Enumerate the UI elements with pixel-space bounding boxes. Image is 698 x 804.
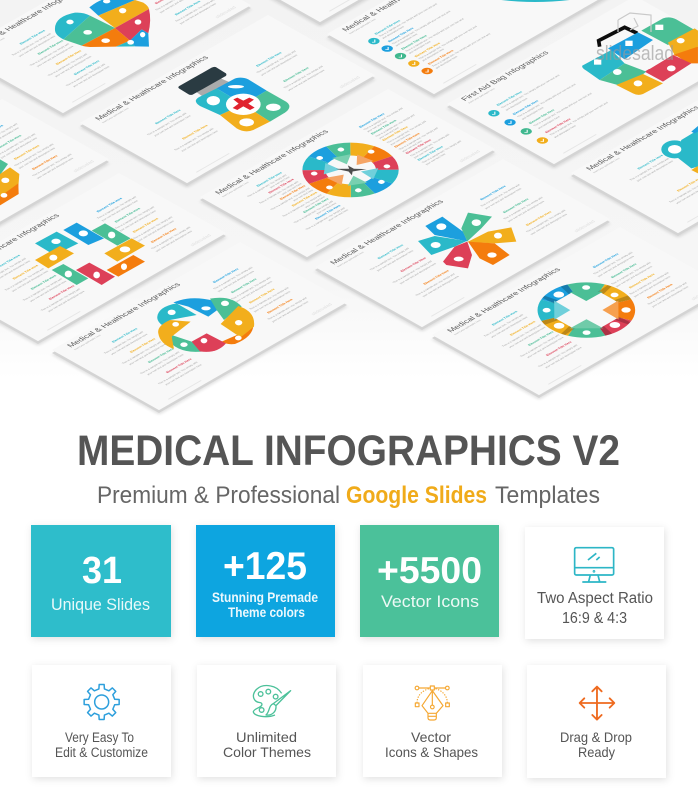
icon: gear (84, 684, 119, 719)
panel: top slide edge (209, 0, 512, 27)
card: aspect ratio: 16:9 & 4:3 (562, 610, 627, 627)
panel: first aid bag slide: This is a sample text. You simply add your own text and (532, 92, 593, 127)
panel: bottle slide: Element Title Here (255, 51, 283, 67)
panel: swirl cross slide: your own text and description here (270, 300, 310, 323)
panel: swirl cross slide: This is a sample text. You simply add (266, 296, 308, 321)
panel: slide with list and blue arc: and description here (421, 47, 446, 62)
panel: bottle slide: Element Title Here (181, 124, 209, 140)
panel: cross slide: Element Title Here (96, 197, 124, 213)
panel: heart slide: your own text and description here (71, 65, 111, 88)
panel: circle and cross slide: This is a sample text. You simply add (610, 261, 652, 285)
panel: bottle slide: your own text and description here (180, 129, 219, 152)
panel: flower slide: This is a sample text. You simply add (368, 247, 411, 271)
panel: left slide with orange pieces: This is a sample text. You simply add (31, 153, 73, 177)
panel: swirl cross slide: Element Title Here (266, 298, 294, 314)
panel: caduceus ring slide: This is a sample text. You simply add (421, 140, 463, 164)
panel: swirl cross slide: your own text and description here (146, 353, 185, 376)
card: 125 theme colors: +125 (223, 545, 307, 588)
card: 31 unique slides: Unique Slides (51, 596, 150, 614)
panel: circle and cross slide: your own text and description here (614, 265, 654, 288)
panel: bottle slide: Insert your subheader here (101, 107, 131, 124)
panel: first aid bag slide (443, 0, 698, 169)
panel: caduceus ring slide: your own text here (389, 133, 412, 146)
panel: circle and cross slide: your own text and description here (596, 255, 636, 278)
panel: slide with list and blue arc: and description here (407, 40, 432, 54)
panel: heart slide: This is a sample text. You simply add (28, 42, 71, 67)
panel: circle and cross slide: your own text and description here (508, 326, 547, 348)
panel: swirl cross slide: Element Title Here (129, 337, 157, 353)
puzzle graphic (661, 126, 698, 173)
panel: swirl cross slide (48, 242, 351, 415)
panel: flower slide: your own text and description here (506, 200, 546, 223)
panel: slide with list and blue arc: and description here (381, 25, 406, 39)
panel: cross slide: your own text and description here (118, 209, 158, 232)
panel: circle and cross slide: Element Title Here (491, 310, 519, 326)
panel: cross slide: your own text and description here (10, 270, 50, 292)
panel: swirl cross slide: Insert your subheader here (73, 334, 103, 351)
panel: heart slide: Element Title Here (19, 29, 47, 45)
card: easy to edit: Edit & Customize (55, 745, 148, 760)
panel: cross slide: Element Title Here (48, 284, 76, 300)
card: 31 unique slides (31, 525, 171, 637)
panel: cross slide: Element Title Here (114, 207, 142, 223)
panel: circle and cross slide: Element Title Here (545, 341, 573, 357)
hero: isometric slides collage (0, 0, 698, 415)
panel: heart slide: This is a sample text. You simply add (65, 63, 107, 87)
panel: circle and cross slide: your own text and description here (489, 316, 529, 338)
panel: caduceus ring slide: Element Title Here (393, 132, 421, 148)
panel: slide with list and blue arc: Element Title Here (387, 27, 415, 43)
panel: caduceus ring slide: your own text here (327, 208, 350, 221)
panel: left slide with orange pieces: This is a sample text. You simply add (13, 143, 55, 167)
panel: flower slide: your own text and description here (398, 262, 438, 285)
panel: caduceus ring slide: Element Title Here (370, 119, 398, 135)
panel: swirl cross slide: your own text and description here (109, 333, 149, 355)
panel: heart slide: Element Title Here (55, 49, 83, 66)
panel: cross slide: Element Title Here (150, 227, 178, 243)
panel: cross slide: This is a sample text. You simply add (3, 267, 46, 291)
swirl graphic (157, 298, 254, 352)
panel: circle and cross slide: Element Title Here (592, 253, 620, 269)
panel: bottle slide: your own text and description here (153, 114, 192, 137)
panel: heart slide: your own text and description here (35, 45, 75, 67)
panel: cross slide: Element Title Here (132, 217, 160, 233)
panel: flower slide: This is a sample text. You simply add (391, 260, 433, 284)
panel: circle and cross slide: This is a sample text. You simply add (592, 251, 634, 275)
title: MEDICAL INFOGRAPHICS V2 (77, 427, 620, 475)
card: easy to edit (32, 665, 171, 777)
card: vector shapes: Vector (411, 729, 451, 745)
card: 31 unique slides: 31 (82, 550, 122, 592)
panel: first aid bag slide: Element Title Here (495, 90, 524, 106)
card: 125 theme colors (196, 525, 335, 637)
panel: flower slide: your own text and description here (529, 213, 569, 235)
panel: flower slide: Element Title Here (479, 185, 507, 201)
panel: right puzzle slide: Element Title Here (636, 154, 665, 170)
card: aspect ratio: Two Aspect Ratio (537, 590, 653, 607)
panel: first aid bag slide: and description here (520, 106, 545, 120)
panel: flower slide: This is a sample text. You simply add (479, 183, 521, 207)
panel: caduceus ring slide: your own text here (424, 152, 447, 166)
panel: circle and cross slide: Element Title Here (509, 320, 537, 336)
panel: caduceus ring slide: your own text here (315, 202, 338, 215)
panel: bottle slide: Medical & Healthcare Infographics (93, 54, 211, 122)
card: vector shapes: Icons & Shapes (385, 744, 478, 760)
watermark: slidesalad (596, 43, 674, 65)
panel: flower slide: your own text and description here (483, 187, 523, 210)
panel: flower slide: Insert your subheader here (336, 251, 366, 268)
panel: slide with list and blue arc: and description here (434, 55, 459, 69)
panel: heart slide: This is a sample text. You simply add (10, 32, 53, 56)
panel: caduceus ring slide: Element Title Here (267, 178, 295, 194)
panel: heart slide: your own text and description here (17, 35, 57, 57)
subtitle (97, 482, 600, 509)
card: color themes: Color Themes (223, 744, 311, 760)
panel: cross slide: This is a sample text. You simply add (132, 216, 174, 240)
card: drag and drop (527, 665, 666, 778)
panel: swirl cross slide: Element Title Here (212, 268, 240, 284)
panel: swirl cross slide: your own text and description here (164, 363, 203, 386)
panel: heart slide: Element Title Here (37, 39, 65, 55)
panel: swirl cross slide: your own text and description here (128, 343, 167, 366)
panel: swirl cross slide: This is a sample text. You simply add (103, 330, 145, 354)
panel: flower slide: Element Title Here (525, 210, 553, 227)
panel: cross slide: your own text and description here (46, 290, 86, 313)
card: vector shapes (363, 665, 502, 777)
panel: caduceus ring slide: your own text here (280, 182, 303, 195)
panel: bottle slide: Element Title Here (154, 109, 182, 125)
panel: left slide with orange pieces (0, 99, 113, 272)
panel: circle and cross slide: This is a sample text. You simply add (483, 313, 525, 337)
icon: monitor (575, 548, 614, 582)
panel: caduceus ring slide: Element Title Here (302, 197, 330, 214)
panel: caduceus ring slide: slidesalad (458, 149, 482, 163)
panel: slide with list and blue arc: This is a sample text. You simply add your own text and (404, 17, 465, 52)
panel: cross slide: your own text and description here (136, 219, 176, 242)
panel: circle and cross slide: your own text and description here (650, 285, 690, 308)
panel: left slide with orange pieces: slidesalad (72, 159, 96, 173)
panel: cross slide: This is a sample text. You simply add (21, 277, 64, 301)
icon: palette and brush (253, 686, 291, 717)
panel: caduceus ring slide: This is a sample text. You simply add (409, 133, 451, 157)
panel: heart slide: Element Title Here (73, 60, 101, 76)
panel: circle and cross slide: This is a sample text. You simply add (628, 271, 670, 295)
panel: heart slide: your own text and description here (53, 55, 93, 78)
panel: swirl cross slide: This is a sample text. You simply add (139, 351, 181, 375)
icon: pen tool (415, 686, 449, 720)
panel: bottle slide: This is a sample text. You simply add (146, 112, 188, 136)
panel: cross slide: This is a sample text. You simply add (150, 226, 192, 250)
card: 125 theme colors: Stunning Premade (212, 589, 318, 605)
panel: swirl cross slide: your own text and description here (216, 270, 256, 293)
panel: first aid bag slide: and description here (553, 124, 578, 139)
hero background (0, 0, 698, 395)
panel: swirl cross slide: This is a sample text. You simply add (157, 361, 199, 385)
panel: first aid bag slide: Element Title Here (528, 109, 556, 125)
panel: right puzzle slide: your own text and description here (635, 159, 675, 182)
panel: first aid bag slide: Element Title Here (512, 99, 540, 116)
panel: circle and cross slide: Insert your subheader here (453, 319, 483, 336)
panel: slide with list and blue arc: Element Title Here (427, 49, 455, 65)
panel: first aid bag slide: and description here (504, 97, 529, 111)
card: 5500 vector icons: +5500 (377, 550, 482, 591)
panel: caduceus ring slide: your own text here (401, 139, 424, 153)
panel: cross slide: Element Title Here (30, 274, 58, 290)
panel: bottle slide: Element Title Here (282, 66, 310, 83)
panel: caduceus ring slide: This is a sample text. You simply add (258, 180, 300, 204)
panel: first aid bag slide: Element Title Here (544, 118, 572, 134)
panel: circle and cross slide: Element Title Here (610, 263, 638, 279)
panel: cross slide: your own text and description here (100, 199, 140, 222)
panel: swirl cross slide: slidesalad (310, 302, 334, 316)
panel: caduceus ring slide: This is a sample text. You simply add (246, 174, 288, 198)
pie ring graphic (515, 269, 658, 351)
card: easy to edit: Very Easy To (65, 730, 134, 745)
card: color themes: Unlimited (236, 729, 297, 745)
panel: caduceus ring slide: your own text here (303, 195, 327, 208)
panel: cross slide: This is a sample text. You simply add (114, 205, 156, 230)
first aid bag puzzle graphic (582, 17, 698, 95)
panel: bottle slide: slidesalad (338, 75, 362, 89)
panel: caduceus ring slide: your own text here (377, 126, 401, 139)
panel: slide with list and blue arc: This is a sample text. You simply add your own text and (417, 25, 479, 60)
panel: first aid bag slide: and description here (536, 115, 561, 129)
card: 125 theme colors: Theme colors (228, 604, 305, 620)
panel: caduceus ring slide: Element Title Here (358, 112, 386, 129)
subtitle: Premium & Professional (97, 482, 340, 509)
panel: first aid bag slide: First Aid Bag Infographics (459, 49, 551, 102)
panel: circle and cross slide: This is a sample text. You simply add (537, 344, 579, 368)
card: color themes (197, 665, 336, 777)
panel: circle and cross slide: your own text and description here (632, 275, 672, 298)
panel: flower slide: This is a sample text. You simply add (502, 196, 544, 220)
panel: slide with list and blue arc: This is a sample text. You simply add your own text and (431, 32, 492, 67)
ring chart (277, 128, 424, 212)
panel: circle and cross slide: This is a sample text. You simply add (646, 281, 688, 306)
panel: swirl cross slide: This is a sample text. You simply add (121, 340, 163, 365)
panel: first aid bag slide: This is a sample text. You simply add your own text and (516, 83, 577, 118)
panel: flower slide: Medical & Healthcare Infographics (328, 198, 446, 266)
panel: flower slide: This is a sample text. You simply add (414, 272, 456, 297)
panel: right puzzle slide (567, 65, 698, 238)
partial graphic (0, 159, 19, 205)
panel: bottle slide: This is a sample text. You simply add (173, 127, 215, 151)
watermark (596, 13, 674, 65)
panel: caduceus ring slide: your own text here (292, 188, 315, 202)
panel: caduceus ring slide: This is a sample text. You simply add (304, 206, 347, 231)
card: drag and drop: Drag & Drop (560, 729, 632, 745)
panel: caduceus ring slide: Medical & Healthcare Infographics (213, 128, 331, 196)
panel: caduceus ring slide: your own text here (412, 146, 435, 159)
panel: caduceus ring slide: This is a sample text. You simply add (385, 120, 428, 144)
panel: right puzzle slide: This is a sample text. You simply add (628, 157, 670, 181)
panel: slide with list and blue arc: Insert your subheader here (348, 18, 378, 35)
panel: cross slide: your own text and description here (28, 280, 68, 302)
panel: flower slide: Element Title Here (502, 198, 530, 214)
panel: left slide with orange pieces: your own text and description here (0, 136, 39, 159)
heart graphic (55, 0, 150, 47)
panel: caduceus ring slide: Insert your subheader here (221, 181, 251, 198)
subtitle: Google Slides (346, 482, 487, 509)
panel: circle and cross slide: Element Title Here (628, 273, 656, 289)
panel: swirl cross slide: Element Title Here (248, 288, 276, 304)
panel: caduceus ring slide: Element Title Here (314, 204, 342, 220)
subtitle: Templates (495, 482, 600, 509)
panel: caduceus ring slide: Element Title Here (255, 171, 284, 187)
panel: first aid bag slide: Insert your subheader here (467, 87, 497, 104)
panel: circle and cross slide: Medical & Healthcare Infographics (445, 266, 563, 334)
panel: flower slide (311, 159, 614, 332)
panel: swirl cross slide: This is a sample text. You simply add (212, 266, 254, 290)
card: drag and drop: Ready (578, 744, 615, 760)
blue arc graphic (501, 0, 570, 2)
card: 5500 vector icons: Vector Icons (381, 592, 479, 611)
panel: flower slide: Element Title Here (399, 256, 428, 273)
panel: heart slide: your own text and description here (178, 2, 218, 25)
panel: right puzzle slide: Medical & Healthcare Infographics (584, 104, 698, 172)
panel: circle and cross slide: Element Title Here (646, 283, 674, 299)
panel: circle and cross slide: This is a sample text. You simply add (519, 333, 561, 358)
panel: bottle slide: This is a sample text. You simply add (282, 65, 324, 89)
panel: swirl cross slide: This is a sample text. You simply add (230, 276, 272, 300)
panel: swirl cross slide: Element Title Here (165, 358, 193, 374)
panel: caduceus ring slide: your own text here (365, 120, 389, 133)
panel: caduceus ring slide: This is a sample text. You simply add (269, 187, 311, 211)
panel: cross slide (0, 173, 230, 346)
panel: swirl cross slide: Medical & Healthcare Infographics (65, 281, 183, 349)
panel: left slide with orange pieces: Element Title Here (31, 154, 59, 171)
panel: swirl cross slide: your own text and description here (234, 280, 274, 303)
panel: circle and cross slide: Element Title Here (527, 330, 555, 346)
panel: circle and cross slide: This is a sample text. You simply add (501, 323, 543, 347)
panel: swirl cross slide: Element Title Here (147, 348, 175, 364)
panel: bottle slide (76, 15, 379, 188)
panel: circle and cross slide: your own text and description here (544, 346, 583, 369)
panel: caduceus ring slide: This is a sample text. You simply add (397, 126, 440, 151)
panel: slide with list and blue arc: Element Title Here (374, 19, 402, 35)
panel: swirl cross slide: Element Title Here (230, 278, 258, 294)
panel: cross slide: slidesalad (189, 233, 213, 247)
panel: caduceus ring slide: Element Title Here (416, 145, 445, 161)
panel: swirl cross slide: your own text and description here (252, 290, 292, 313)
panel: slide with list and blue arc (323, 0, 626, 99)
panel: circle and cross slide (428, 227, 698, 400)
panel: first aid bag slide: This is a sample text. You simply add your own text and (500, 74, 561, 109)
icon: move arrows (580, 687, 614, 720)
panel: caduceus ring slide: This is a sample text. You simply add (362, 107, 404, 131)
panel: caduceus ring slide: This is a sample text. You simply add (281, 193, 323, 218)
panel: cross slide: Element Title Here (12, 264, 40, 280)
panel: caduceus ring slide: your own text here (268, 175, 291, 189)
panel: left slide with orange pieces: your own text and description here (17, 147, 57, 169)
panel: caduceus ring slide: Element Title Here (291, 191, 319, 207)
panel: right puzzle slide: Insert your subheader here (592, 157, 622, 174)
panel: caduceus ring slide: Element Title Here (381, 125, 409, 142)
panel: first aid bag slide: This is a sample text. You simply add your own text and (548, 101, 610, 136)
cross graphic (35, 223, 145, 285)
panel: heart slide: slidesalad (214, 5, 238, 19)
card: aspect ratio (525, 527, 664, 639)
panel: flower slide: Element Title Here (377, 244, 405, 260)
panel: caduceus ring slide (196, 89, 499, 262)
panel: bottle slide: your own text and description here (286, 69, 326, 91)
panel: heart slide (0, 0, 255, 118)
panel: flower slide: slidesalad (573, 219, 597, 233)
card: 5500 vector icons (360, 525, 499, 637)
panel: circle and cross slide: your own text and description here (526, 336, 565, 359)
panel: cross slide: This is a sample text. You simply add (40, 287, 82, 312)
panel: slide with list and blue arc: and description here (394, 33, 419, 47)
panel: swirl cross slide: Element Title Here (111, 327, 139, 343)
panel: slide with list and blue arc: Element Title Here (414, 42, 442, 58)
panel: heart slide: This is a sample text. You simply add (47, 52, 89, 77)
panel: flower slide: Element Title Here (422, 269, 450, 285)
panel: caduceus ring slide: This is a sample text. You simply add (374, 113, 416, 138)
panel: caduceus ring slide: This is a sample text. You simply add (292, 200, 335, 224)
panel: flower slide: This is a sample text. You simply add (525, 209, 567, 233)
panel: flower slide: your own text and description here (375, 249, 415, 272)
panel: slide with list and blue arc: This is a sample text. You simply add your own text and (391, 10, 452, 45)
panel: left slide with orange pieces: Element Title Here (13, 144, 41, 160)
bottle graphic (178, 67, 289, 131)
panel: slide with list and blue arc: Element Title Here (400, 34, 428, 50)
panel: slide with list and blue arc: This is a sample text. You simply add your own text and (377, 2, 439, 38)
panel: caduceus ring slide: Element Title Here (404, 139, 433, 155)
flower graphic (418, 213, 516, 268)
panel: cross slide: This is a sample text. You simply add (96, 195, 138, 219)
panel: bottle slide: your own text and description here (259, 53, 299, 76)
panel: bottle slide: This is a sample text. You simply add (255, 50, 297, 74)
panel: swirl cross slide: This is a sample text. You simply add (248, 286, 290, 310)
panel: heart slide: Element Title Here (174, 0, 202, 16)
panel: left slide with orange pieces: your own text and description here (35, 157, 75, 179)
panel: caduceus ring slide: Element Title Here (279, 184, 307, 200)
panel: flower slide: your own text and description here (421, 275, 461, 297)
panel: cross slide: your own text and description here (154, 230, 194, 252)
